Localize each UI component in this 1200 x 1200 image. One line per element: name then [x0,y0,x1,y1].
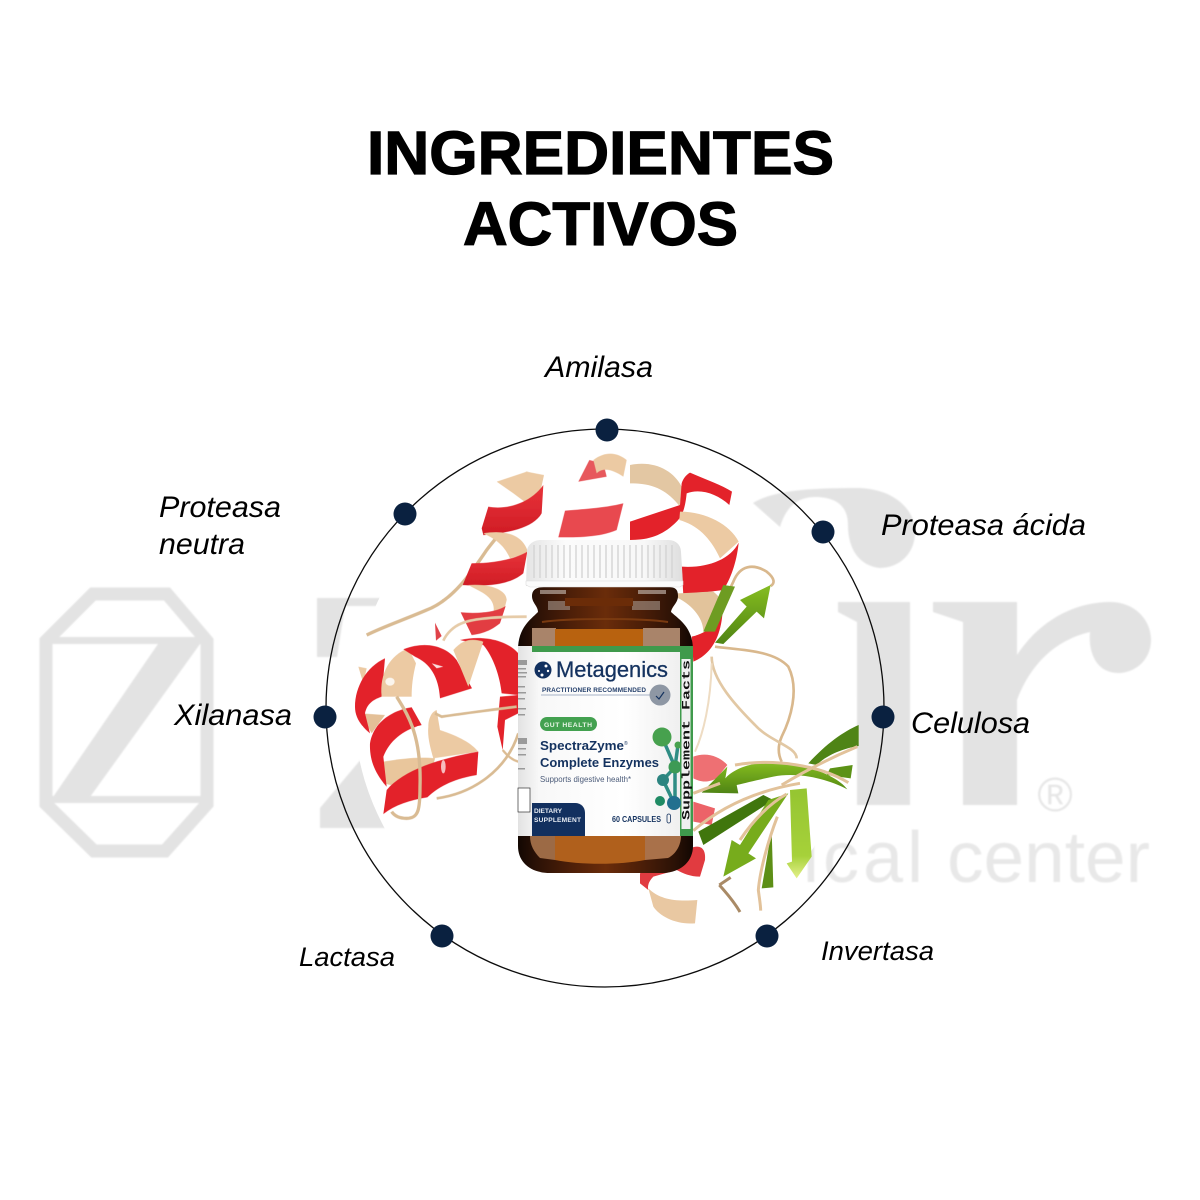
dietary supplement box: DIETARY [534,808,563,815]
seal [650,684,670,706]
label: Amilasa: Amilasa [543,351,653,384]
glass jar [518,587,693,873]
watermark: letter i stem [838,602,910,805]
strands [695,567,797,762]
watermark: word center: center [947,818,1150,898]
practitioner recommended: PRACTITIONER RECOMMENDED [542,687,646,694]
green arrow upper [715,585,771,644]
label: Invertasa: Invertasa [821,936,934,966]
dietary supplement box [532,803,585,836]
title: INGREDIENTES [367,119,834,187]
dietary supplement box: SUPPLEMENT [534,817,581,824]
node dots [314,418,894,948]
label: Celulosa: Celulosa [911,707,1030,740]
green top band [532,646,693,652]
label: Proteasa neutra: neutra [159,528,245,561]
label: Proteasa neutra [159,491,281,561]
Metagenics logo mark [534,662,552,678]
product bottle [518,540,694,873]
product name: ® [624,740,628,747]
orbit ring [326,429,884,987]
label [518,646,694,836]
watermark: letter a arc [753,488,915,568]
gut health pill [540,717,597,731]
green side band [680,646,693,836]
protein molecule: right helix and beta sheets [630,464,859,924]
product name: Complete Enzymes [540,755,659,770]
product name [540,738,659,770]
label background [518,646,693,836]
product name: SpectraZyme [540,738,624,753]
label: Proteasa neutra: Proteasa [159,491,281,524]
tiny side label text [518,660,530,812]
watermark: letter r [933,602,1151,805]
upper helix ribbons [435,472,544,641]
label: Xilanasa: Xilanasa [173,699,292,732]
watermark: big letter Z [317,598,520,828]
label: Proteasa ácida: Proteasa ácida [881,509,1086,542]
green beta sheet arrows [698,725,859,888]
watermark: registered mark: ® [1037,769,1073,822]
label: Lactasa: Lactasa [299,942,395,972]
gut health pill: GUT HEALTH [544,722,592,729]
left strand long [367,478,542,635]
supplement facts vertical panel: Supplement Facts [682,660,694,820]
upper right helix [630,464,739,662]
watermark: word ical: ical [803,818,923,898]
pink helix fragments [640,755,727,924]
molecule icon [652,728,682,810]
title: ACTIVOS [463,190,738,258]
watermark: Zair medical center logo [46,488,1151,898]
white cap [526,540,683,587]
beta sheet tan strands [693,747,857,912]
ingredient labels [159,351,1086,972]
brand name: Metagenics [556,657,668,682]
title [367,119,834,258]
supports digestive health: Supports digestive health* [540,775,632,784]
supplement facts vertical panel [682,659,694,829]
glass highlights [530,590,681,864]
watermark: octagon emblem [46,594,207,851]
capsule count: 60 CAPSULES [612,815,661,824]
lower helix ribbons [355,638,518,818]
capsule glyph [667,814,670,823]
small ribbons above the cap [558,454,627,537]
protein molecule: left helix [355,454,627,818]
white disc behind molecule [354,457,856,959]
